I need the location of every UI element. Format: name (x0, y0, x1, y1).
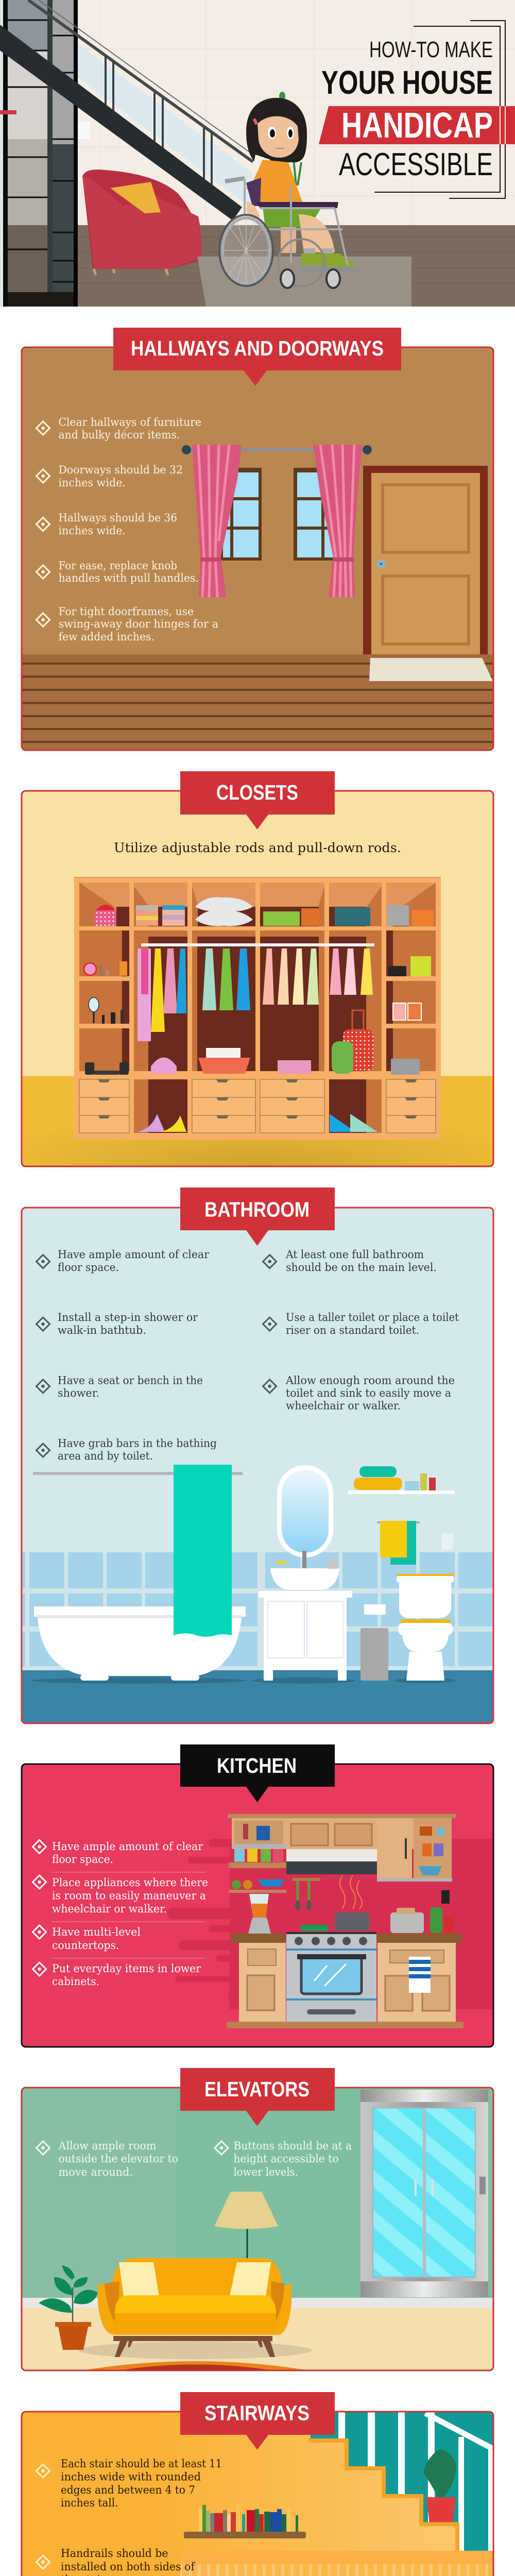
heading: hallways and doorways (113, 328, 401, 386)
bullet list: stairways: installed on both sides of (61, 2561, 196, 2573)
bullet list: kitchen: floor space. (52, 1853, 113, 1866)
heading: elevators: ELEVATORS (204, 2077, 310, 2101)
heading: bathroom: BATHROOM (204, 1198, 310, 1222)
heading: closets (180, 771, 335, 829)
bullet list: elevators: height accessible to (234, 2153, 339, 2165)
bullet list: kitchen: cabinets. (52, 1975, 99, 1988)
bullet list: hallways: Clear hallways of furniture (59, 416, 201, 429)
bullet list: bathroom: Have a seat or bench in the (58, 1375, 203, 1387)
panel: kitchen (22, 1744, 493, 2047)
heading: elevators (180, 2068, 335, 2126)
bullet list: kitchen: is room to easily maneuver a (52, 1890, 206, 1902)
bullet list: kitchen: countertops. (52, 1939, 119, 1952)
hero scene: wheelchair user at stairs (0, 0, 515, 307)
heading: kitchen (180, 1744, 335, 1802)
bullet list: elevators: move around. (59, 2166, 133, 2178)
drawers (79, 1079, 436, 1133)
door mat (369, 658, 493, 681)
bullet list: bathroom: area and by toilet. (58, 1450, 153, 1462)
shelf items and shoes (84, 956, 431, 1132)
bullet list: hallways: few added inches. (59, 631, 154, 643)
panel: elevators (22, 2068, 493, 2370)
panel: hallways and doorways (22, 328, 493, 750)
bullet list: kitchen: Place appliances where there (52, 1876, 208, 1889)
bullet list: bathroom: Install a step-in shower or (58, 1311, 198, 1324)
bullet list: bathroom: toilet and sink to easily move a (286, 1387, 451, 1399)
windows and curtains (182, 445, 372, 597)
vanity and mirror (259, 1465, 352, 1681)
bullet list: stairways: inches wide with rounded (61, 2471, 201, 2483)
bullet list: kitchen: Have multi-level (52, 1926, 141, 1938)
heading: bathroom (180, 1188, 335, 1246)
staircase wall (180, 2412, 492, 2576)
potted plant (39, 2265, 98, 2350)
heading: kitchen: KITCHEN (217, 1754, 297, 1777)
bullet list: elevators: Allow ample room (58, 2140, 157, 2152)
closet floor (22, 1076, 493, 1166)
heading: hallways and doorways: HALLWAYS AND DOORWAYS (131, 336, 384, 360)
bullet list: bathroom: At least one full bathroom (285, 1248, 424, 1261)
lower cabinets and counter items (227, 1890, 464, 2028)
heading: stairways: STAIRWAYS (204, 2401, 310, 2425)
stair glass and rail (0, 0, 253, 221)
bullet list: stairways: Handrails should be (61, 2547, 168, 2560)
rod and hanging clothes (138, 943, 374, 1041)
bullet list: bathroom: walk-in bathtub. (58, 1324, 146, 1336)
left steel column (0, 0, 90, 307)
bullet list: bathroom: riser on a standard toilet. (286, 1324, 419, 1336)
heading: stairways (180, 2392, 335, 2450)
bathtub and curtain (33, 1465, 246, 1681)
closet instruction text: Utilize adjustable rods and pull-down rods. (114, 840, 401, 855)
bullet list: kitchen (33, 1840, 208, 1988)
bookshelf (184, 2505, 306, 2538)
door (363, 466, 488, 654)
bullet list: kitchen: Have ample amount of clear (52, 1840, 203, 1853)
bullet list: hallways: inches wide. (59, 477, 126, 489)
bullet list: hallways: and bulky décor items. (59, 429, 180, 441)
panel: bathroom (22, 1188, 493, 1723)
bullet list: elevators: outside the elevator to (59, 2153, 178, 2165)
bullet list: kitchen: Put everyday items in lower (52, 1962, 201, 1975)
bullet list: hallways: Hallways should be 36 (59, 512, 177, 524)
bullet list: elevators: Buttons should be at a (234, 2140, 352, 2152)
bullet list: bathroom: Have ample amount of clear (58, 1248, 210, 1261)
elevator doors (360, 2090, 488, 2297)
elevator room floor (22, 2088, 493, 2370)
floor planks (22, 654, 493, 750)
bullet list: elevators (36, 2140, 352, 2178)
bullet list: bathroom (36, 1248, 459, 1462)
bullet list: hallways: Doorways should be 32 (59, 464, 183, 476)
panel: closets (22, 771, 493, 1166)
bullet list: hallways: handles with pull handles. (59, 572, 199, 584)
bullet list: stairways (36, 2458, 222, 2576)
luggage, bags, basket (151, 1010, 373, 1074)
bullet list: hallways (36, 416, 218, 643)
open shelves and utensils (229, 1844, 362, 1910)
bullet list: bathroom: wheelchair or walker. (286, 1400, 401, 1412)
heading: closets: CLOSETS (216, 781, 298, 804)
bullet list: bathroom: Have grab bars in the bathing (58, 1437, 217, 1450)
bullet list: hallways: inches wide. (59, 524, 126, 537)
bullet list: bathroom: Allow enough room around the (285, 1375, 455, 1387)
title frame lines (374, 21, 505, 198)
wardrobe (74, 877, 441, 1140)
wall tiles and floor (22, 1552, 493, 1723)
bullet list: hallways: For ease, replace knob (59, 560, 177, 572)
rug (197, 257, 411, 307)
bullet list: hallways: swing-away door hinges for a (59, 618, 218, 630)
panel: stairways (22, 2392, 493, 2576)
bullet list: bathroom: Use a taller toilet or place a toilet (286, 1311, 459, 1324)
bullet list: hallways: For tight doorframes, use (59, 605, 194, 618)
kitchen wall shadow stripes (167, 1839, 493, 2009)
stove and oven (286, 1912, 376, 2022)
floor lamp (214, 2192, 278, 2264)
bullet list: bathroom: shower. (58, 1387, 99, 1399)
bullet list: stairways: Each stair should be at least 11 (61, 2458, 222, 2470)
armchair (82, 170, 202, 275)
woman in wheelchair (219, 92, 359, 288)
upper cabinets (228, 1814, 456, 1882)
bullet list: elevators: lower levels. (234, 2166, 298, 2178)
bullet list: stairways: edges and between 4 to 7 (61, 2484, 195, 2496)
bullet list: kitchen: wheelchair or walker. (52, 1903, 167, 1915)
bullet list: stairways: inches tall. (61, 2497, 118, 2509)
top shelf items (95, 897, 434, 926)
yellow sofa (98, 2258, 291, 2357)
bullet list: bathroom: should be on the main level. (286, 1261, 437, 1274)
bullet list: bathroom: floor space. (58, 1261, 119, 1274)
shelf, towels and toilet (348, 1466, 455, 1681)
